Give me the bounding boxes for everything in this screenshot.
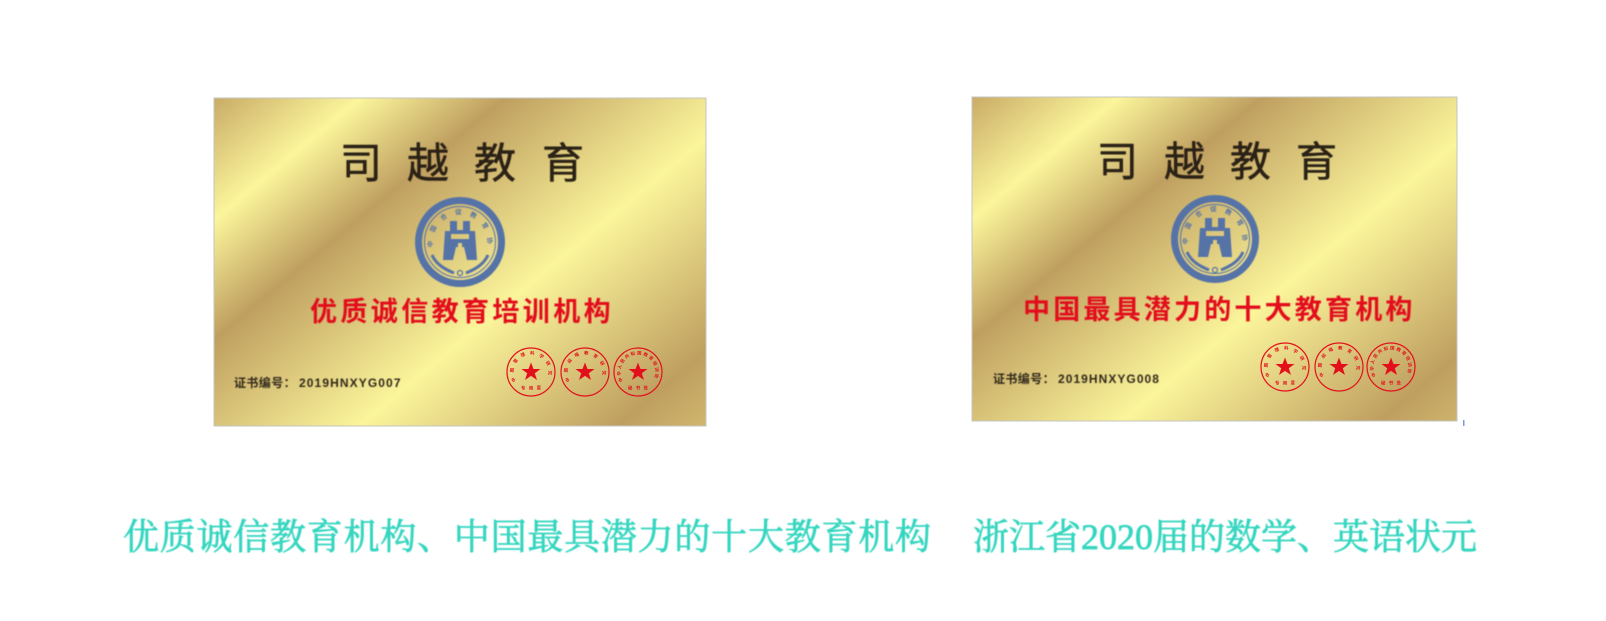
icon: association emblem: 中国合促教育协会 [426,208,494,248]
caption left: 优质诚信教育机构、中国最具潜力的十大教育机构 [123,517,931,557]
plaque title: 育 [542,140,584,187]
seal 3: 中华人民共和国教育培训协会 [616,350,660,382]
award name: 优质诚信教育培训机构 [310,296,614,327]
seal 1: 中国管理科学研究院 [1264,346,1306,377]
seal 3 [1366,342,1416,392]
icon: association emblem: 中国合促教育协会 [1182,205,1248,244]
seal 3 [613,347,663,397]
caption right: 浙江省2020届的数学、英语状元 [973,517,1477,557]
gold plate [214,98,706,426]
seal 1: 专用章 [521,385,541,390]
seal 2 [1314,342,1364,392]
icon: association emblem [1170,194,1260,284]
certificate number: 证书编号： [993,371,1055,386]
certificate number: 2019HNXYG008 [1058,372,1160,386]
plaque title: 司 [340,140,382,187]
icon: association emblem [414,196,506,288]
plaque title: 越 [1164,139,1205,185]
plaque: 优质诚信教育培训机构 [214,98,706,426]
seal 2: 中国战略教育研究会 [1318,346,1360,377]
plaque title: 越 [407,140,449,187]
certificate number: 证书编号： [234,375,296,390]
plaque title: 司 [1097,139,1138,185]
seal 2 [560,347,610,397]
plaque title: 教 [474,140,516,187]
gold plate [972,97,1457,421]
small blue tick mark [1463,420,1464,426]
seal 1: 专用章 [1275,380,1295,386]
seal 1 [1260,342,1310,392]
plaque: 中国最具潜力的十大教育机构 [972,96,1458,422]
seal 3: 中华人民共和国教育培训协会 [1370,346,1412,377]
award name: 中国最具潜力的十大教育机构 [1023,295,1416,325]
seal 2: 中国战略教育研究会 [564,350,606,382]
seal 3: 秘书处 [1381,380,1401,386]
seal 1: 中国管理科学研究院 [510,350,552,382]
caption: honours and top scorers [123,517,1477,557]
plaque title: 教 [1230,139,1271,185]
seal 1 [506,347,556,397]
certificate number: 2019HNXYG007 [299,376,402,390]
seal 3: 秘书处 [628,385,648,390]
plaque title: 育 [1296,139,1337,185]
